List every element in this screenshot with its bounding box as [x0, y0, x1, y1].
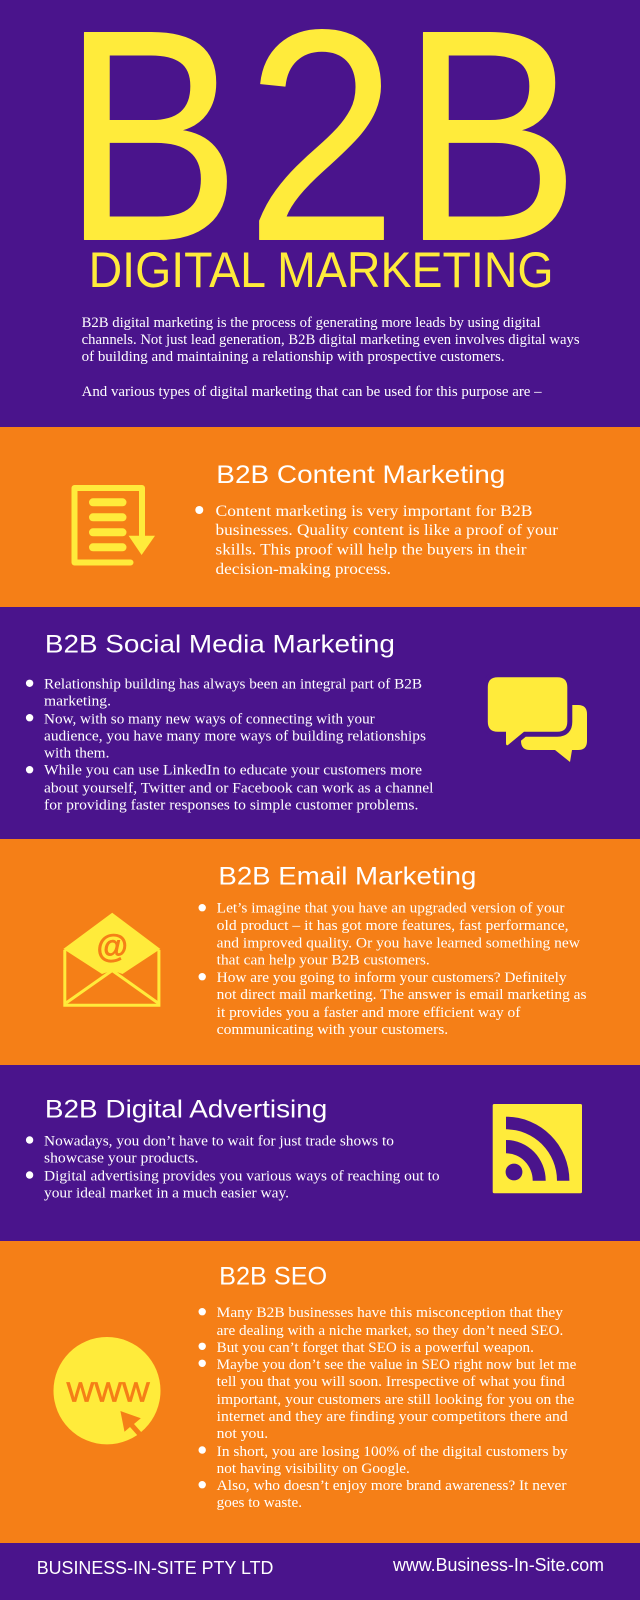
- intro text: And various types of digital marketing that can be used for this purpose are –: [82, 384, 542, 400]
- bullet list: social media: for providing faster responses to simple customer problems.: [44, 797, 418, 813]
- intro text: B2B digital marketing is the process of generating more leads by using digital: [82, 315, 541, 331]
- bullet list: SEO: are dealing with a niche market, so they don’t need SEO.: [217, 1323, 563, 1339]
- footer: website: www.Business-In-Site.com: [392, 1555, 604, 1575]
- bullet list: social media: While you can use LinkedIn to educate your customers more: [44, 762, 422, 778]
- bullet list: SEO: not having visibility on Google.: [217, 1461, 410, 1477]
- bullet list: digital advertising: showcase your products.: [44, 1151, 198, 1167]
- intro text: of building and maintaining a relationship with prospective customers.: [82, 349, 505, 365]
- bullet list: SEO: Also, who doesn’t enjoy more brand awareness? It never: [217, 1478, 566, 1494]
- panel: B2B social media marketing: [0, 607, 640, 839]
- bullet list: social media: about yourself, Twitter and or Facebook can work as a channel: [44, 780, 434, 796]
- bullet list: SEO: [198, 1305, 577, 1511]
- icon: WWW circle with cursor: WWW: [66, 1377, 150, 1408]
- footer: [0, 1543, 640, 1600]
- bullet list: SEO: not you.: [217, 1426, 268, 1442]
- bullet list: social media: Now, with so many new ways of connecting with your: [44, 711, 375, 727]
- bullet list: email marketing: that can help your B2B customers.: [217, 953, 430, 969]
- bullet list: content marketing: decision-making process.: [216, 561, 391, 578]
- bullet list: SEO: Maybe you don’t see the value in SEO right now but let me: [217, 1357, 577, 1373]
- icon: document with down arrow: [74, 488, 155, 562]
- bullet list: content marketing: [195, 503, 559, 578]
- panel: B2B digital advertising: [0, 1065, 640, 1241]
- bullet list: SEO: In short, you are losing 100% of the digital customers by: [217, 1444, 568, 1460]
- heading: social media marketing: B2B Social Media Marketing: [45, 630, 395, 658]
- bullet list: email marketing: Let’s imagine that you have an upgraded version of your: [217, 901, 564, 917]
- panel: B2B SEO: [0, 1241, 640, 1543]
- panel: header: [0, 0, 640, 427]
- bullet list: digital advertising: [26, 1134, 440, 1201]
- bullet list: email marketing: and improved quality. Or you have learned something new: [217, 936, 580, 952]
- icon: RSS feed: [493, 1104, 582, 1193]
- icon: open envelope with at sign: [63, 913, 160, 1005]
- bullet list: content marketing: businesses. Quality content is like a proof of your: [216, 522, 559, 539]
- panel: B2B email marketing: [0, 839, 640, 1065]
- bullet list: social media: audience, you have many more ways of building relationships: [44, 729, 426, 745]
- heading: digital advertising: B2B Digital Advertising: [45, 1095, 327, 1123]
- bullet list: social media: [26, 676, 434, 813]
- bullet list: email marketing: old product – it has got more features, fast performance,: [217, 918, 569, 934]
- bullet list: email marketing: communicating with your customers.: [217, 1022, 448, 1038]
- bullet list: digital advertising: your ideal market in a much easier way.: [44, 1185, 289, 1201]
- heading: SEO: B2B SEO: [219, 1262, 327, 1290]
- bullet list: email marketing: not direct mail marketing. The answer is email marketing as: [217, 987, 587, 1003]
- bullet list: social media: Relationship building has always been an integral part of B2B: [44, 676, 422, 692]
- bullet list: SEO: tell you that you will soon. Irrespective of what you find: [217, 1374, 565, 1390]
- bullet list: social media: with them.: [44, 746, 109, 762]
- bullet list: digital advertising: Digital advertising provides you various ways of reaching out to: [44, 1168, 440, 1184]
- bullet list: SEO: important, your customers are still looking for you on the: [217, 1392, 575, 1408]
- icon: WWW circle with cursor: [54, 1337, 160, 1444]
- bullet list: email marketing: it provides you a faster and more efficient way of: [217, 1005, 520, 1021]
- bullet list: SEO: goes to waste.: [217, 1495, 302, 1511]
- panel: B2B content marketing: [0, 427, 640, 607]
- intro text: [82, 315, 580, 400]
- bullet list: email marketing: [198, 901, 587, 1038]
- bullet list: SEO: internet and they are finding your competitors there and: [217, 1409, 568, 1425]
- bullet list: content marketing: skills. This proof will help the buyers in their: [216, 541, 527, 558]
- intro text: channels. Not just lead generation, B2B digital marketing even involves digital ways: [82, 332, 580, 348]
- icon: chat bubbles: [488, 677, 587, 762]
- subtitle: digital marketing: DIGITAL MARKETING: [89, 242, 554, 298]
- icon: open envelope with at sign: @: [97, 928, 128, 964]
- title: B2B: [62, 0, 580, 304]
- bullet list: email marketing: How are you going to inform your customers? Definitely: [217, 970, 567, 986]
- footer: company name: BUSINESS-IN-SITE PTY LTD: [37, 1558, 274, 1578]
- heading: email marketing: B2B Email Marketing: [218, 863, 476, 891]
- heading: content marketing: B2B Content Marketing: [216, 461, 505, 489]
- bullet list: content marketing: Content marketing is very important for B2B: [216, 503, 532, 520]
- bullet list: social media: marketing.: [44, 694, 111, 710]
- bullet list: SEO: Many B2B businesses have this misconception that they: [217, 1305, 563, 1321]
- bullet list: SEO: But you can’t forget that SEO is a powerful weapon.: [217, 1340, 534, 1356]
- bullet list: digital advertising: Nowadays, you don’t have to wait for just trade shows to: [44, 1134, 394, 1150]
